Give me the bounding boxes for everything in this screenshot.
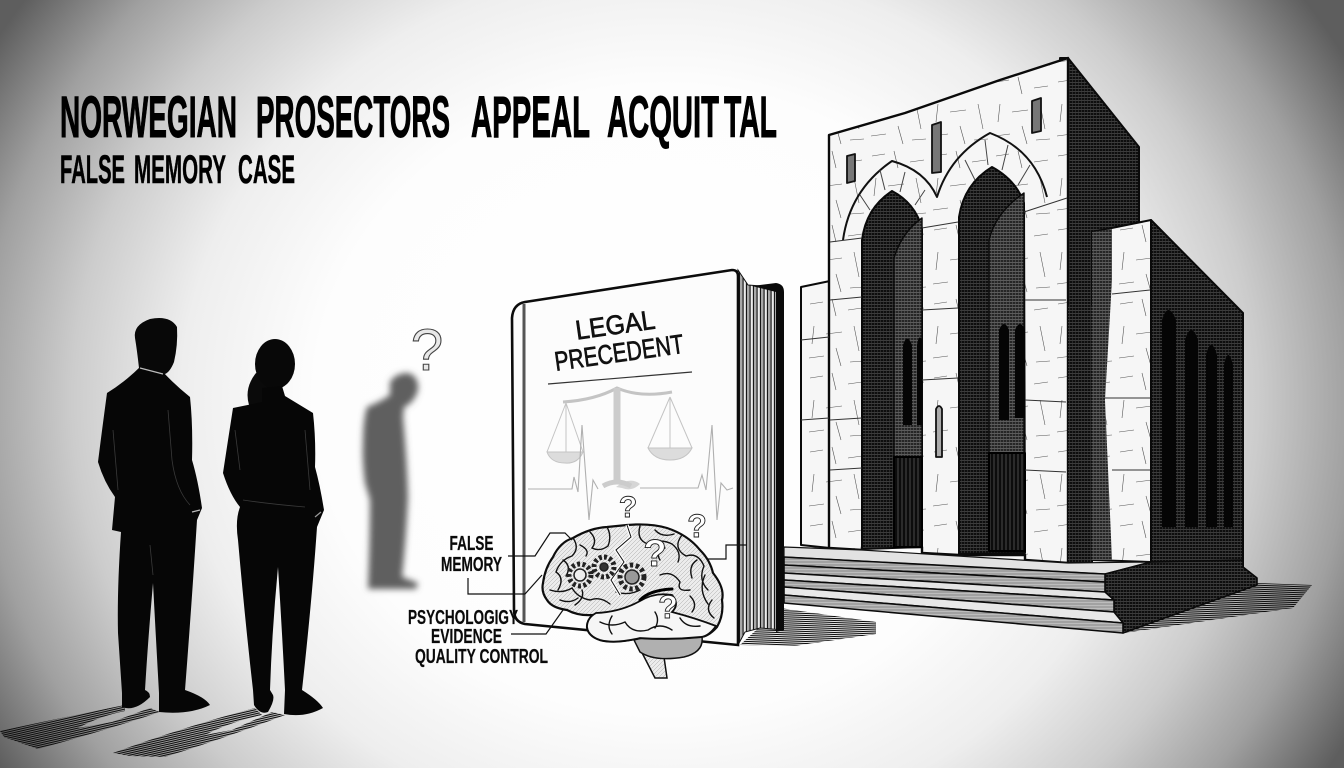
text: TAL xyxy=(724,85,777,150)
subtitle: FALSE xyxy=(60,148,125,192)
right arch inner recess xyxy=(989,193,1024,551)
slit windows xyxy=(847,98,1041,457)
question marks in and near brain xyxy=(619,491,707,625)
left arch inner recess xyxy=(894,218,922,547)
steps side xyxy=(1105,560,1257,633)
wing side windows xyxy=(1162,310,1233,527)
book shadow on ground xyxy=(740,608,876,646)
right arch opening xyxy=(959,167,1025,554)
cerebrum outline xyxy=(542,524,723,642)
woman ponytail xyxy=(248,373,272,425)
question marks in and near brain: ? xyxy=(658,589,678,625)
left arch opening xyxy=(862,191,922,549)
subtitle xyxy=(60,148,295,192)
woman waist line and seams xyxy=(235,430,310,507)
callout: psychology evidence quality control xyxy=(408,607,563,668)
book heading: LEGAL xyxy=(573,305,657,346)
title: PROSECTORS xyxy=(256,85,450,150)
book back cover edge xyxy=(752,283,784,632)
book heading: PRECEDENT xyxy=(553,329,686,377)
icon: question mark above blurred person: ? xyxy=(411,318,443,383)
left arch windows xyxy=(903,337,922,425)
title: NORWEGIAN xyxy=(60,85,237,150)
man coat seams xyxy=(113,410,190,575)
callout leader: right of brain xyxy=(707,545,747,559)
subtitle: CASE xyxy=(238,148,295,192)
rear wing front face xyxy=(1092,220,1151,562)
brain illustration xyxy=(542,491,723,678)
tower front face xyxy=(829,58,1068,563)
left arch door xyxy=(894,457,922,547)
man head xyxy=(135,318,177,374)
callout: false memory: FALSE xyxy=(450,533,494,555)
masonry courses xyxy=(801,198,1150,472)
man body silhouette xyxy=(98,366,210,713)
right arch door xyxy=(989,453,1025,551)
rear wing side face xyxy=(1151,220,1243,567)
book cover xyxy=(512,270,738,645)
man's ground shadow xyxy=(0,705,160,749)
left low wing xyxy=(801,281,830,548)
figure: man silhouette with shadow xyxy=(0,318,210,749)
cerebellum xyxy=(634,634,702,659)
title: ACQUIT xyxy=(607,85,719,150)
steps front xyxy=(784,557,1123,633)
right arch windows xyxy=(999,324,1025,420)
figure: woman silhouette with shadow xyxy=(113,339,324,757)
subtitle: MEMORY xyxy=(134,148,226,192)
woman's ground shadow xyxy=(113,708,285,757)
callout: false memory xyxy=(441,533,572,594)
crack through brain xyxy=(611,525,631,595)
dark pier beside tower xyxy=(1068,305,1092,562)
callout: psychology evidence quality control: PSYCHOLOGIGY xyxy=(408,607,518,629)
gears inside brain xyxy=(569,557,644,589)
question marks in and near brain: ? xyxy=(687,508,707,544)
book: legal precedent xyxy=(512,270,876,646)
question marks in and near brain: ? xyxy=(643,533,667,575)
woman body silhouette xyxy=(223,386,324,715)
courthouse building xyxy=(784,58,1312,633)
scales of justice xyxy=(547,388,692,486)
tower side face xyxy=(1060,58,1139,562)
callout: psychology evidence quality control: EVIDENCE xyxy=(431,626,502,648)
book spine crease xyxy=(522,304,526,622)
brain stem xyxy=(637,643,667,678)
building ground shadow xyxy=(1124,583,1312,633)
outer arch trim xyxy=(843,133,1047,240)
temporal lobe xyxy=(587,594,716,642)
brain folds xyxy=(550,526,714,634)
woman hand highlight xyxy=(315,512,321,517)
ECG heartbeat line xyxy=(528,425,733,520)
book heading rule xyxy=(548,372,692,384)
book pages block xyxy=(738,270,783,645)
figure: blurred person looking down xyxy=(363,373,418,589)
question marks in and near brain: ? xyxy=(619,491,637,524)
book heading xyxy=(549,301,686,377)
callout: false memory: MEMORY xyxy=(441,554,502,576)
arch voussoir ticks xyxy=(860,140,1030,210)
title xyxy=(60,85,777,150)
title: APPEAL xyxy=(471,85,590,150)
woman head xyxy=(255,339,295,389)
man collar and cuff xyxy=(140,368,200,512)
smoke wisp xyxy=(616,481,640,489)
callout: psychology evidence quality control: QUALITY CONTROL xyxy=(415,646,548,668)
wing shaded edge xyxy=(1092,229,1112,560)
platform top xyxy=(784,547,1151,574)
